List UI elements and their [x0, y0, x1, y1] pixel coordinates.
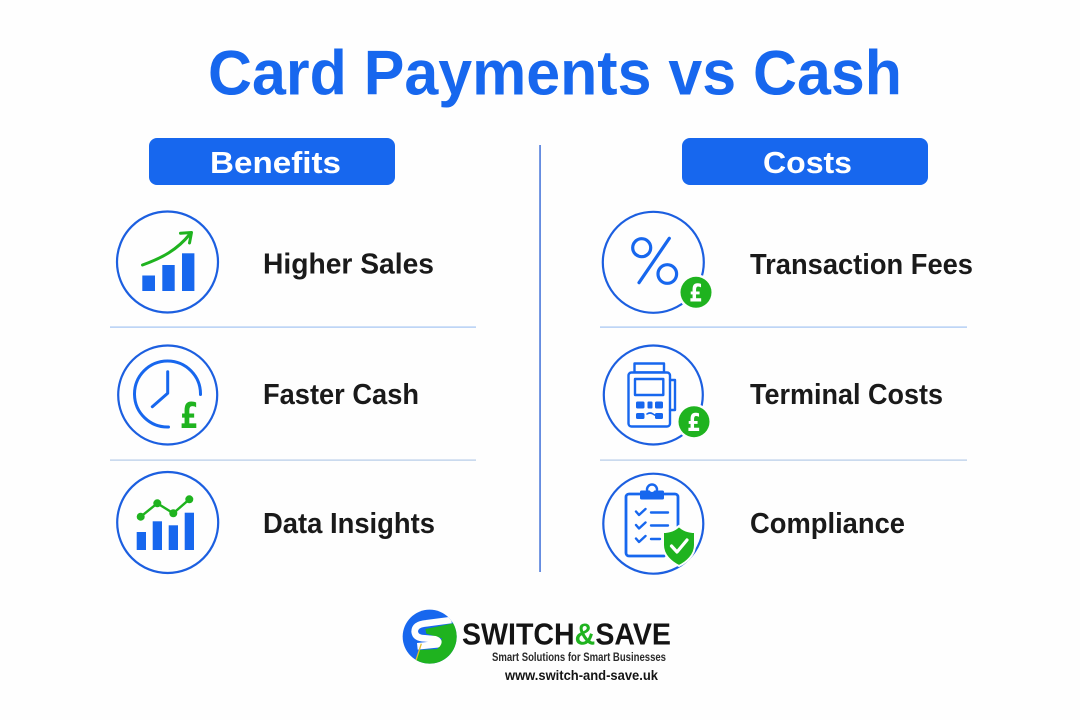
icon: percent with pound badge: £ — [689, 278, 703, 308]
icon: card terminal with pound badge: £ — [687, 408, 701, 437]
icon: logo mark — [403, 610, 458, 665]
tagline: Smart Solutions for Smart Businesses — [492, 650, 666, 664]
label: terminal costs: Terminal Costs — [750, 379, 943, 411]
icon: compliance clipboard with shield — [603, 474, 703, 574]
label: higher sales: Higher Sales — [263, 248, 434, 280]
label: data insights: Data Insights — [263, 508, 435, 540]
website: www.switch-and-save.uk — [504, 667, 658, 683]
panel: benefits — [110, 138, 476, 573]
heading: benefits — [149, 138, 395, 185]
label: compliance: Compliance — [750, 508, 905, 540]
icon: data insights chart — [117, 472, 218, 573]
icon: card terminal with pound badge — [604, 346, 712, 444]
heading: benefits: Benefits — [210, 145, 341, 180]
wordmark: SWITCH&SAVE — [462, 616, 671, 652]
label: faster cash: Faster Cash — [263, 379, 419, 411]
title: Card Payments vs Cash — [208, 38, 902, 108]
heading: costs — [682, 138, 928, 185]
icon: clock with pound — [118, 346, 217, 444]
infographic canvas — [110, 48, 972, 680]
panel: costs — [600, 138, 973, 574]
logo: switch and save — [403, 610, 671, 683]
label: transaction fees: Transaction Fees — [750, 249, 973, 281]
heading: costs: Costs — [763, 145, 852, 180]
icon: clock with pound: £ — [180, 396, 198, 437]
icon: higher sales chart — [117, 212, 218, 312]
icon: percent with pound badge — [603, 212, 714, 313]
